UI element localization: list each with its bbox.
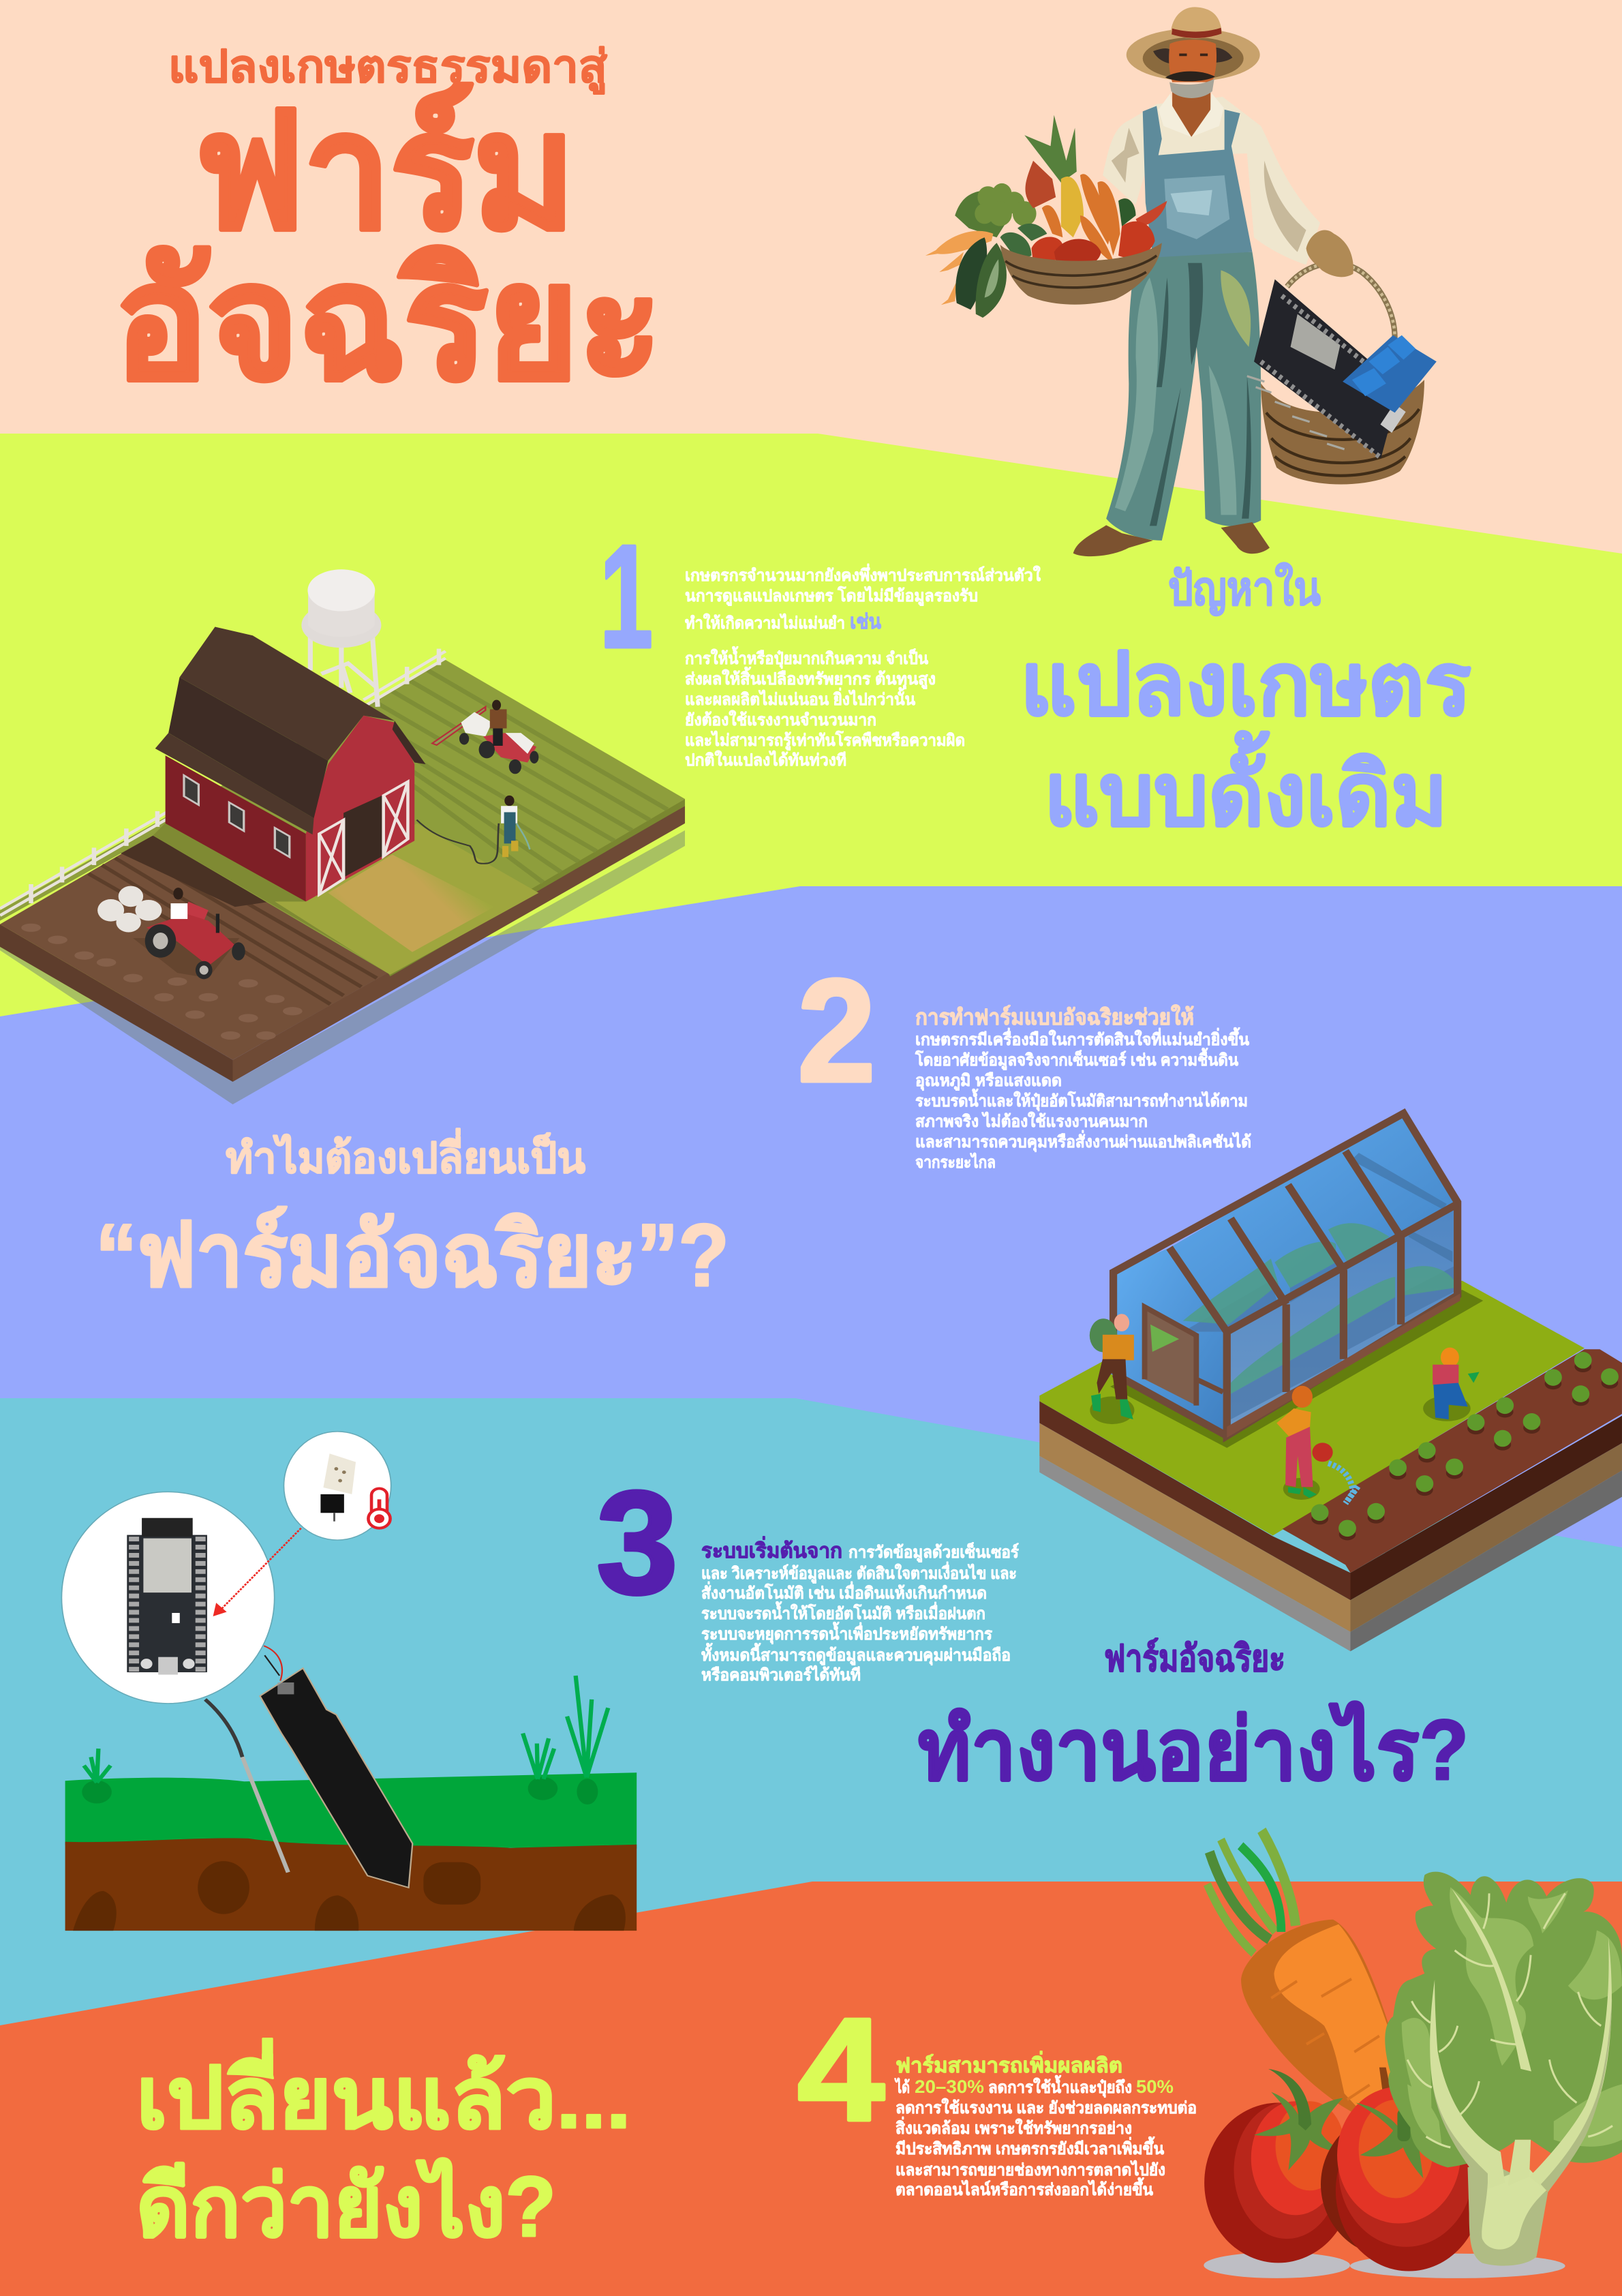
barn door left (319, 820, 343, 894)
text block: how the system works: ทั้งหมดนี้สามารถดูข้อมูลและควบคุมผ่านมือถือ (701, 1642, 1011, 1666)
green field (0, 660, 685, 975)
hat crown (1171, 7, 1222, 39)
left basket body (1000, 243, 1162, 305)
greenhouse shadow (1110, 1290, 1483, 1448)
barn door opening (343, 796, 382, 877)
text block: how the system works: ระบบเริ่มต้นจาก (701, 1536, 842, 1562)
connector pads (277, 1682, 294, 1694)
ESP32 board (127, 1518, 207, 1675)
ground shadows (1204, 2252, 1350, 2278)
grass blades (84, 1676, 608, 1783)
lettuce leaves (1385, 1872, 1622, 2167)
seedling shadows (1311, 1361, 1618, 1540)
text block: how smart farming helps (915, 1004, 1251, 1172)
barn door right (384, 782, 408, 856)
carrot second root (1379, 2068, 1396, 2117)
soil moisture sensor wires (264, 1646, 282, 1680)
heading: why change to: ทำไมต้องเปลี่ยนเป็น (226, 1128, 585, 1182)
microcontroller board (1254, 280, 1400, 458)
soil stones (73, 1861, 626, 1931)
grass patches (82, 1777, 598, 1804)
text block: results of smart farming: และสามารถขยายช่องทางการตลาดไปยัง (896, 2160, 1165, 2179)
red dotted arrow (213, 1528, 301, 1616)
garden hose (416, 820, 499, 864)
woman with watering can (1276, 1386, 1359, 1503)
lettuce ribs (1430, 1889, 1612, 2192)
temperature sensor bubble (284, 1432, 391, 1540)
gardener carrying sack (1090, 1314, 1134, 1424)
inside benches and plants (1183, 1263, 1454, 1419)
text block: results of smart farming: ฟาร์มสามารถเพิ่มผลผลิต (896, 2051, 1122, 2077)
text block: problem description: และไม่สามารถรู้เท่าทันโรคพืชหรือความผิด (685, 730, 965, 751)
text block: problem description: การให้น้ำหรือปุ๋ยมากเกินความ จำเป็น (685, 646, 929, 669)
text block: how smart farming helps: และสามารถควบคุมหรือสั่งงานผ่านแอปพลิเคชันได้ (915, 1130, 1251, 1153)
barn roof (179, 626, 395, 761)
carrot leaves (1207, 1830, 1296, 1953)
illustration: carrot, tomatoes and lettuce (1204, 1830, 1622, 2278)
grass ground (65, 1772, 637, 1849)
text block: how smart farming helps: ระบบรดน้ำและให้ปุ๋ยอัตโนมัติสามารถทำงานได้ตาม (915, 1088, 1248, 1112)
barn windows (184, 775, 290, 857)
lettuce stem base (1468, 2161, 1548, 2266)
dirt road (328, 855, 494, 952)
base side walls (0, 924, 233, 1082)
temperature probe (205, 1700, 243, 1757)
right tomato calyx (1356, 2103, 1424, 2178)
text block: how smart farming helps: การทำฟาร์มแบบอัจฉริยะช่วยให้ (915, 1004, 1194, 1029)
text block: how the system works: สั่งงานอัตโนมัติ เช่น เมื่อดินแห้งเกินกำหนด (701, 1581, 987, 1603)
number 4: 4 (797, 1987, 885, 2151)
panel: periwinkle why-change section background (0, 886, 1622, 1636)
title: smart farm word two: อัจฉริยะ (114, 232, 662, 412)
ground shadow (0, 830, 685, 1104)
right tomato (1321, 2087, 1482, 2271)
relay module (1343, 335, 1437, 412)
hair sides (1153, 48, 1232, 64)
number 2: 2 (797, 948, 876, 1113)
DHT sensor (320, 1453, 356, 1522)
thermometer icon (368, 1488, 391, 1528)
illustration: isometric traditional farm with barn (0, 569, 685, 1104)
text block: how smart farming helps: จากระยะไกล (915, 1152, 996, 1172)
text block: problem description: ส่งผลให้สิ้นเปลืองทรัพยากร ต้นทุนสูง (685, 666, 936, 690)
panel: orange benefits section background (0, 1882, 1622, 2296)
text block: how the system works: การวัดข้อมูลด้วยเซ็นเซอร์ (848, 1542, 1019, 1562)
farmer with hose (501, 796, 530, 857)
left tomato calyx (1254, 2069, 1347, 2171)
right basket body (1261, 380, 1424, 485)
lettuce veins (1407, 1893, 1612, 2147)
text block: results of smart farming: 50% (1136, 2076, 1174, 2097)
text block: how the system works: และ วิเคราะห์ข้อมูลและ ตัดสินใจตามเงื่อนไข และ (701, 1561, 1017, 1584)
heading: after changing: เปลี่ยนแล้ว... (136, 2038, 631, 2146)
illustration: isometric greenhouse with gardeners (1039, 1111, 1622, 1651)
text block: problem description: ทำให้เกิดความไม่แม่นยำ (685, 613, 845, 633)
left basket vegetables (925, 115, 1167, 318)
title: smart farm word one: ฟาร์ม (195, 82, 575, 261)
text block: how the system works (701, 1536, 1019, 1685)
barn walls (166, 755, 306, 902)
title: from ordinary farm plots: แปลงเกษตรธรรมดาสู่ (168, 41, 608, 95)
text block: problem description: เกษตรกรจำนวนมากยังคงพึ่งพาประสบการณ์ส่วนตัวใ (685, 563, 1041, 585)
text block: results of smart farming: มีประสิทธิภาพ เกษตรกรยังมีเวลาเพิ่มขึ้น (896, 2136, 1165, 2158)
text block: problem description: ยังต้องใช้แรงงานจำนวนมาก (685, 710, 876, 729)
heading: smart farm question: “ฟาร์มอัจฉริยะ”? (95, 1205, 729, 1305)
heading: problem in: ปัญหาใน (1168, 562, 1321, 616)
microcontroller bubble (61, 1492, 275, 1704)
text block: how smart farming helps: สภาพจริง ไม่ต้องใช้แรงงานคนมาก (915, 1111, 1148, 1131)
lawn around road (275, 824, 538, 975)
vegetable plot (1283, 1349, 1622, 1573)
text block: how the system works: หรือคอมพิวเตอร์ได้ทันที (701, 1665, 861, 1685)
text block: results of smart farming: ตลาดออนไลน์หรือการส่งออกได้ง่ายขึ้น (896, 2177, 1154, 2199)
boots (1073, 522, 1270, 556)
face (1169, 40, 1216, 82)
text block: problem description: เช่น (850, 611, 881, 633)
left tomato (1204, 2101, 1352, 2263)
text block: results of smart farming: ลดการใช้น้ำและปุ๋ยถึง (988, 2074, 1132, 2098)
text block: results of smart farming: ได้ (894, 2077, 910, 2097)
vegetable seedlings (1311, 1352, 1619, 1537)
illustration: farmer carrying vegetables and electronics (925, 7, 1437, 556)
heading: how is it better: ดีกว่ายังไง? (136, 2158, 556, 2254)
illustration: soil sensors and microcontroller (61, 1432, 637, 1931)
sprayer tractor (432, 700, 538, 774)
greenhouse frame (1114, 1113, 1458, 1436)
heading: how does it work: ทำงานอย่างไร? (918, 1702, 1469, 1798)
text block: how smart farming helps: อุณหภูมิ หรือแสงแดด (915, 1072, 1062, 1091)
glove hand (1306, 230, 1353, 277)
panel: blue how-it-works section background (0, 1398, 1622, 2045)
greenhouse door (1145, 1307, 1223, 1406)
collar (1159, 93, 1224, 137)
shirt and arms (1103, 97, 1320, 265)
text block: how smart farming helps: เกษตรกรมีเครื่องมือในการตัดสินใจที่แม่นยำยิ่งขึ้น (915, 1027, 1250, 1049)
overall bib (1143, 106, 1252, 258)
text block: how the system works: ระบบจะรดน้ำให้โดยอัตโนมัติ หรือเมื่อฝนตก (701, 1601, 985, 1623)
heading: traditional: แบบดั้งเดิม (1044, 731, 1448, 844)
soil (65, 1838, 637, 1931)
fences (0, 651, 446, 916)
text block: problem description (685, 563, 1041, 770)
soil plot (0, 836, 388, 1060)
text block: problem description: นการดูแลแปลงเกษตร โดยไม่มีข้อมูลรองรับ (685, 586, 978, 606)
panel: lime problem section background (0, 434, 1622, 1091)
ground layers right (1351, 1416, 1622, 1600)
red tractor with plough (97, 886, 245, 979)
carrot body (1241, 1920, 1402, 2121)
text block: results of smart farming (894, 2051, 1197, 2199)
text block: how the system works: ระบบจะหยุดการรดน้ำเพื่อประหยัดทรัพยากร (701, 1621, 992, 1645)
hat brim (1127, 29, 1260, 81)
soil moisture sensor (260, 1668, 412, 1888)
neck (1172, 91, 1210, 137)
lettuce highlights (1402, 1887, 1622, 2147)
text block: problem description: และผลผลิตไม่แน่นอน ยิ่งไปกว่านั้น (685, 686, 916, 709)
text block: results of smart farming: ลดการใช้แรงงาน และ ยังช่วยลดผลกระทบต่อ (896, 2098, 1197, 2117)
heading: smart farm: ฟาร์มอัจฉริยะ (1104, 1637, 1285, 1679)
text block: results of smart farming: 20–30% (915, 2076, 984, 2097)
text block: problem description: ปกติในแปลงได้ทันท่วงที (685, 750, 846, 770)
number 3: 3 (596, 1460, 678, 1625)
heading: farm plots: แปลงเกษตร (1020, 636, 1471, 734)
number 1: 1 (600, 514, 653, 678)
greenhouse glass (1110, 1248, 1227, 1438)
text block: how smart farming helps: โดยอาศัยข้อมูลจริงจากเซ็นเซอร์ เช่น ความชื้นดิน (915, 1047, 1239, 1070)
right basket handle (1287, 263, 1395, 338)
text block: results of smart farming: สิ่งแวดล้อม เพราะใช้ทรัพยากรอย่าง (896, 2116, 1132, 2138)
water tower (310, 635, 378, 707)
ground layers left (1039, 1401, 1351, 1600)
trousers (1106, 252, 1261, 541)
lawn (1039, 1281, 1585, 1535)
kneeling gardener (1423, 1348, 1480, 1421)
